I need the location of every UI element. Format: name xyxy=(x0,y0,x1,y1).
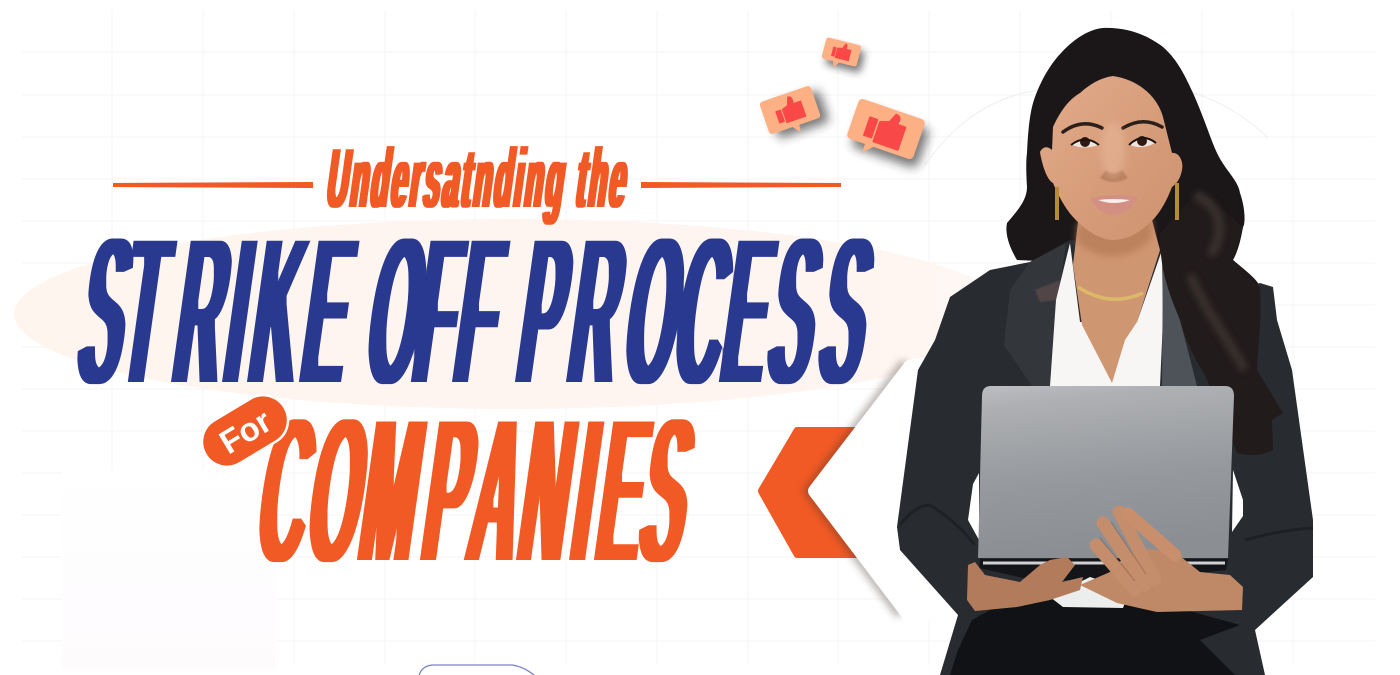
faint pink panel xyxy=(62,470,276,670)
peach ellipse behind title xyxy=(14,219,1010,409)
icon: medium thumbs up bubble xyxy=(759,83,830,142)
right lapel sliver xyxy=(1162,250,1197,386)
hair back xyxy=(1006,28,1283,455)
nose shade xyxy=(1100,170,1128,182)
earrings xyxy=(1055,183,1179,220)
faint arc behind woman xyxy=(925,90,1268,165)
eyebrows xyxy=(1063,122,1162,132)
face xyxy=(1040,76,1182,240)
badge: For xyxy=(193,386,297,476)
neck shadow xyxy=(1076,220,1152,256)
left lapel xyxy=(1004,243,1066,386)
eyes xyxy=(1071,136,1156,148)
gaps beside laptop xyxy=(968,470,1243,540)
laptop lid xyxy=(978,386,1234,558)
gold necklace xyxy=(1078,287,1143,299)
right sleeve cuff fold xyxy=(1245,528,1313,540)
left hand xyxy=(967,557,1083,611)
orange chevron arrow xyxy=(758,427,870,558)
white panel behind woman xyxy=(808,358,1010,620)
icon: large thumbs up bubble xyxy=(843,98,933,171)
badge: For: For xyxy=(213,402,278,461)
lapel reflection xyxy=(1035,280,1060,302)
dark waist xyxy=(950,598,1240,675)
heading: Companies: COMPANIES xyxy=(247,371,706,610)
laptop base xyxy=(979,559,1228,582)
right hand xyxy=(1080,512,1243,612)
hair highlights xyxy=(1190,195,1245,370)
white panel shadow xyxy=(808,362,905,615)
title line: right rule xyxy=(641,182,841,188)
heading: Understanding the: Undersatnding the xyxy=(322,133,633,226)
neck and chest xyxy=(1073,220,1160,383)
heading: Strike Off Process: STRIKE OFF PROCESS xyxy=(68,191,885,433)
icon: small thumbs up bubble xyxy=(820,37,866,74)
title line: left rule xyxy=(113,182,313,188)
woman illustration xyxy=(897,28,1313,675)
hair over shoulder xyxy=(1160,190,1283,455)
shirt hem below laptop xyxy=(1050,577,1130,608)
white shirt xyxy=(1050,243,1163,386)
cheek highlight xyxy=(1101,122,1125,178)
jacket xyxy=(897,240,1313,675)
left sleeve cuff fold xyxy=(900,505,975,545)
outline button (cropped at bottom) xyxy=(418,665,537,675)
lips xyxy=(1090,195,1138,215)
